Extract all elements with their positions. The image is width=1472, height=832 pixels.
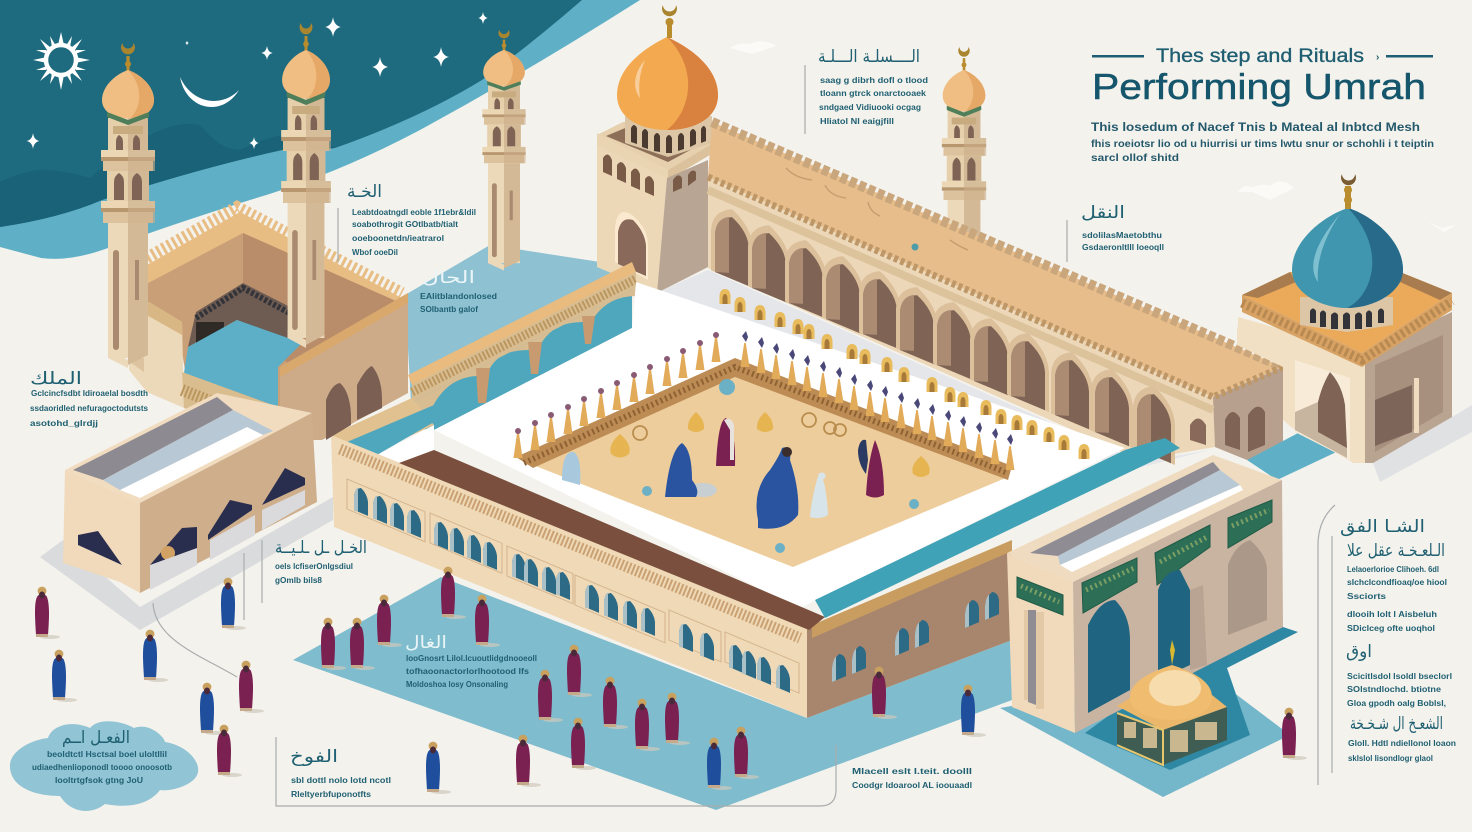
white courtyard deck (434, 282, 1125, 608)
stars (27, 12, 488, 149)
label: central minaret: ooeboonetdn/ieatrarol (352, 233, 444, 243)
front colonnade building (331, 398, 1012, 718)
label: central minaret: الخـة (347, 182, 382, 202)
green inscription panels (1017, 500, 1272, 615)
label: cloud text: looltrtgfsok gtng JoU (55, 775, 143, 785)
label: top centre: Hliatol Nl eaigjfill (820, 116, 894, 126)
right face arches (832, 589, 999, 682)
label: bottom (290, 747, 391, 799)
label: top centre: الــــسلـة الـــلـة (818, 47, 920, 67)
bridge arcade (408, 262, 636, 424)
label: right panel: Scicitlsdol Isoldl bseclorl (1347, 671, 1452, 681)
label: cloud text: udiaedhenlioponodl toooo onoosotb (32, 762, 172, 772)
label: pool area: EAlitblandonlosed (420, 291, 497, 301)
icon: crescent moon (180, 77, 239, 107)
label: left: asotohd_glrdjj (30, 418, 98, 428)
teal pool under bridge (412, 290, 632, 430)
label: teal floor: Moldoshoa losy Onsonaling (406, 679, 508, 689)
label: top centre: saag g dibrh dofl o tlood (820, 75, 928, 85)
label: right panel: Gloa gpodh oalg BoblsI, (1347, 698, 1446, 708)
facade arches (354, 485, 790, 693)
vases and rings (610, 412, 930, 477)
inner courtyard (514, 289, 1090, 567)
small clouds (730, 41, 1458, 232)
label: central minaret: soabothrogit GOtlbatb/tialt (352, 219, 458, 229)
hall arches (711, 200, 1175, 465)
label: central minaret: Wbof ooeDil (352, 247, 398, 257)
label: right panel: Lelaoerlorioe Clihoeh. 6dl (1347, 564, 1439, 574)
finial row right (740, 331, 1014, 470)
teal water channel (815, 438, 1180, 618)
title block: fhis roeiotsr lio od u hiurrisi ur tims lwtu snur or schohli i t teiptin (1091, 138, 1434, 150)
label: right panel: Ssciorts (1347, 591, 1386, 601)
label: right panel: SOlstndlochd. btiotne (1347, 684, 1441, 694)
label: bottom centre (852, 766, 972, 790)
label: central minaret (347, 182, 476, 257)
title block: sarcl ollof shitd (1091, 152, 1179, 164)
label: top centre: sndgaed Vidiuooki ocgag (819, 102, 921, 112)
label: bottom centre: Mlacell eslt I.teit. doollI (852, 766, 972, 776)
label: teal floor: looGnosrt Lilol.lcuoutlidgdnooeoll (406, 653, 537, 663)
label: right panel: اوق (1346, 642, 1372, 662)
title block: › (1376, 52, 1379, 63)
label: right panel: dlooih lolt l Aisbeluh (1347, 609, 1437, 619)
label: lower left: gOmlb bils8 (275, 575, 322, 585)
label: teal floor (405, 633, 537, 689)
courtyard ornate border (516, 358, 1012, 480)
long arcade hall (640, 122, 1283, 470)
label: right panel: SDiclceg ofte uoqhol (1347, 623, 1435, 633)
blue domed building (1237, 174, 1452, 480)
ground: pools and shadows (40, 245, 1472, 810)
label: top centre (818, 47, 928, 126)
label: right panel: Gloll. Hdtl ndiellonol Ioaon (1348, 738, 1456, 748)
label: bottom: الفوخ (290, 747, 338, 767)
label: lower left: oels lcfiserOnlgsdiul (275, 561, 353, 571)
main tower with orange dome (597, 5, 730, 293)
minaret: left tower (101, 43, 155, 368)
label: right panel: sklslol Iisondlogr glaol (1348, 753, 1433, 763)
label: pool area: SOlbantb galof (420, 304, 478, 314)
label: lower left: الخـل ـل ـلـيــة (275, 538, 367, 558)
title block: Performing Umrah (1092, 66, 1426, 107)
label: cloud text: beoldtctl Hsctsal boel uloltllil (47, 749, 167, 759)
label: central minaret: Leabtdoatngdl eoble 1f1ebr&ldil (352, 207, 476, 217)
label: pool area (420, 268, 497, 314)
pilgrims in courtyard (562, 418, 884, 529)
label: left: ssdaoridled nefuragoctodutsts (30, 403, 148, 413)
minaret: central tower (281, 23, 331, 348)
label: right panel: الـلعـخـة عقل علا (1347, 541, 1445, 561)
label: bottom: Rleltyerbfuponotfts (291, 789, 371, 799)
label: lower left (275, 538, 367, 585)
label: teal floor: tofhaoonactorlorlhootood Ifs (406, 666, 529, 676)
title block: Thes step and Rituals (1156, 46, 1364, 67)
label: upper right (1081, 203, 1164, 252)
label: left (30, 369, 148, 428)
label: left: الملك (30, 369, 82, 389)
callout lines (153, 65, 1335, 806)
label: right panel: الشـا الفق (1340, 517, 1425, 537)
label: upper right: النقل (1081, 203, 1125, 223)
label: bottom: sbl dottl nolo lotd ncotl (291, 775, 391, 785)
label: cloud text: الفعـل اــم (62, 728, 130, 748)
label: bottom centre: Coodgr ldoarool AL ioouaadl (852, 780, 972, 790)
label: upper right: sdolilasMaetobthu (1082, 230, 1162, 240)
label: pool area: الحال (422, 268, 475, 288)
floor dots (642, 379, 919, 553)
minaret: right tower (942, 47, 986, 323)
label: left: Gclcincfsdbt Idiroaelal bosdth (31, 388, 148, 398)
label: right panel (1340, 517, 1456, 763)
label: teal floor: الغال (405, 633, 447, 653)
label: upper right: Gsdaeronltlll loeoqll (1082, 242, 1164, 252)
gold niches on deck (720, 289, 1090, 459)
gate building with green panels (1007, 455, 1283, 733)
title block (1091, 46, 1434, 164)
kaaba courtyard building (129, 207, 408, 444)
label: cloud text (32, 728, 172, 785)
low building left (63, 393, 317, 593)
domed kiosk (1117, 640, 1227, 765)
label: right panel: sIchclcondfioaq/oe hiool (1347, 577, 1447, 587)
cloud callout shape (10, 721, 198, 811)
facade panel frames (347, 479, 799, 693)
sky panel with sun, moon and stars (0, 0, 640, 259)
minaret: third tower (482, 30, 526, 271)
pilgrims crowd (35, 567, 1307, 794)
finial row left (514, 332, 720, 458)
icon: sun (33, 32, 90, 90)
title block: This losedum of Nacef Tnis b Mateal al Inbtcd Mesh (1091, 122, 1420, 134)
label: top centre: tloann gtrck onarctooaek (820, 88, 926, 98)
